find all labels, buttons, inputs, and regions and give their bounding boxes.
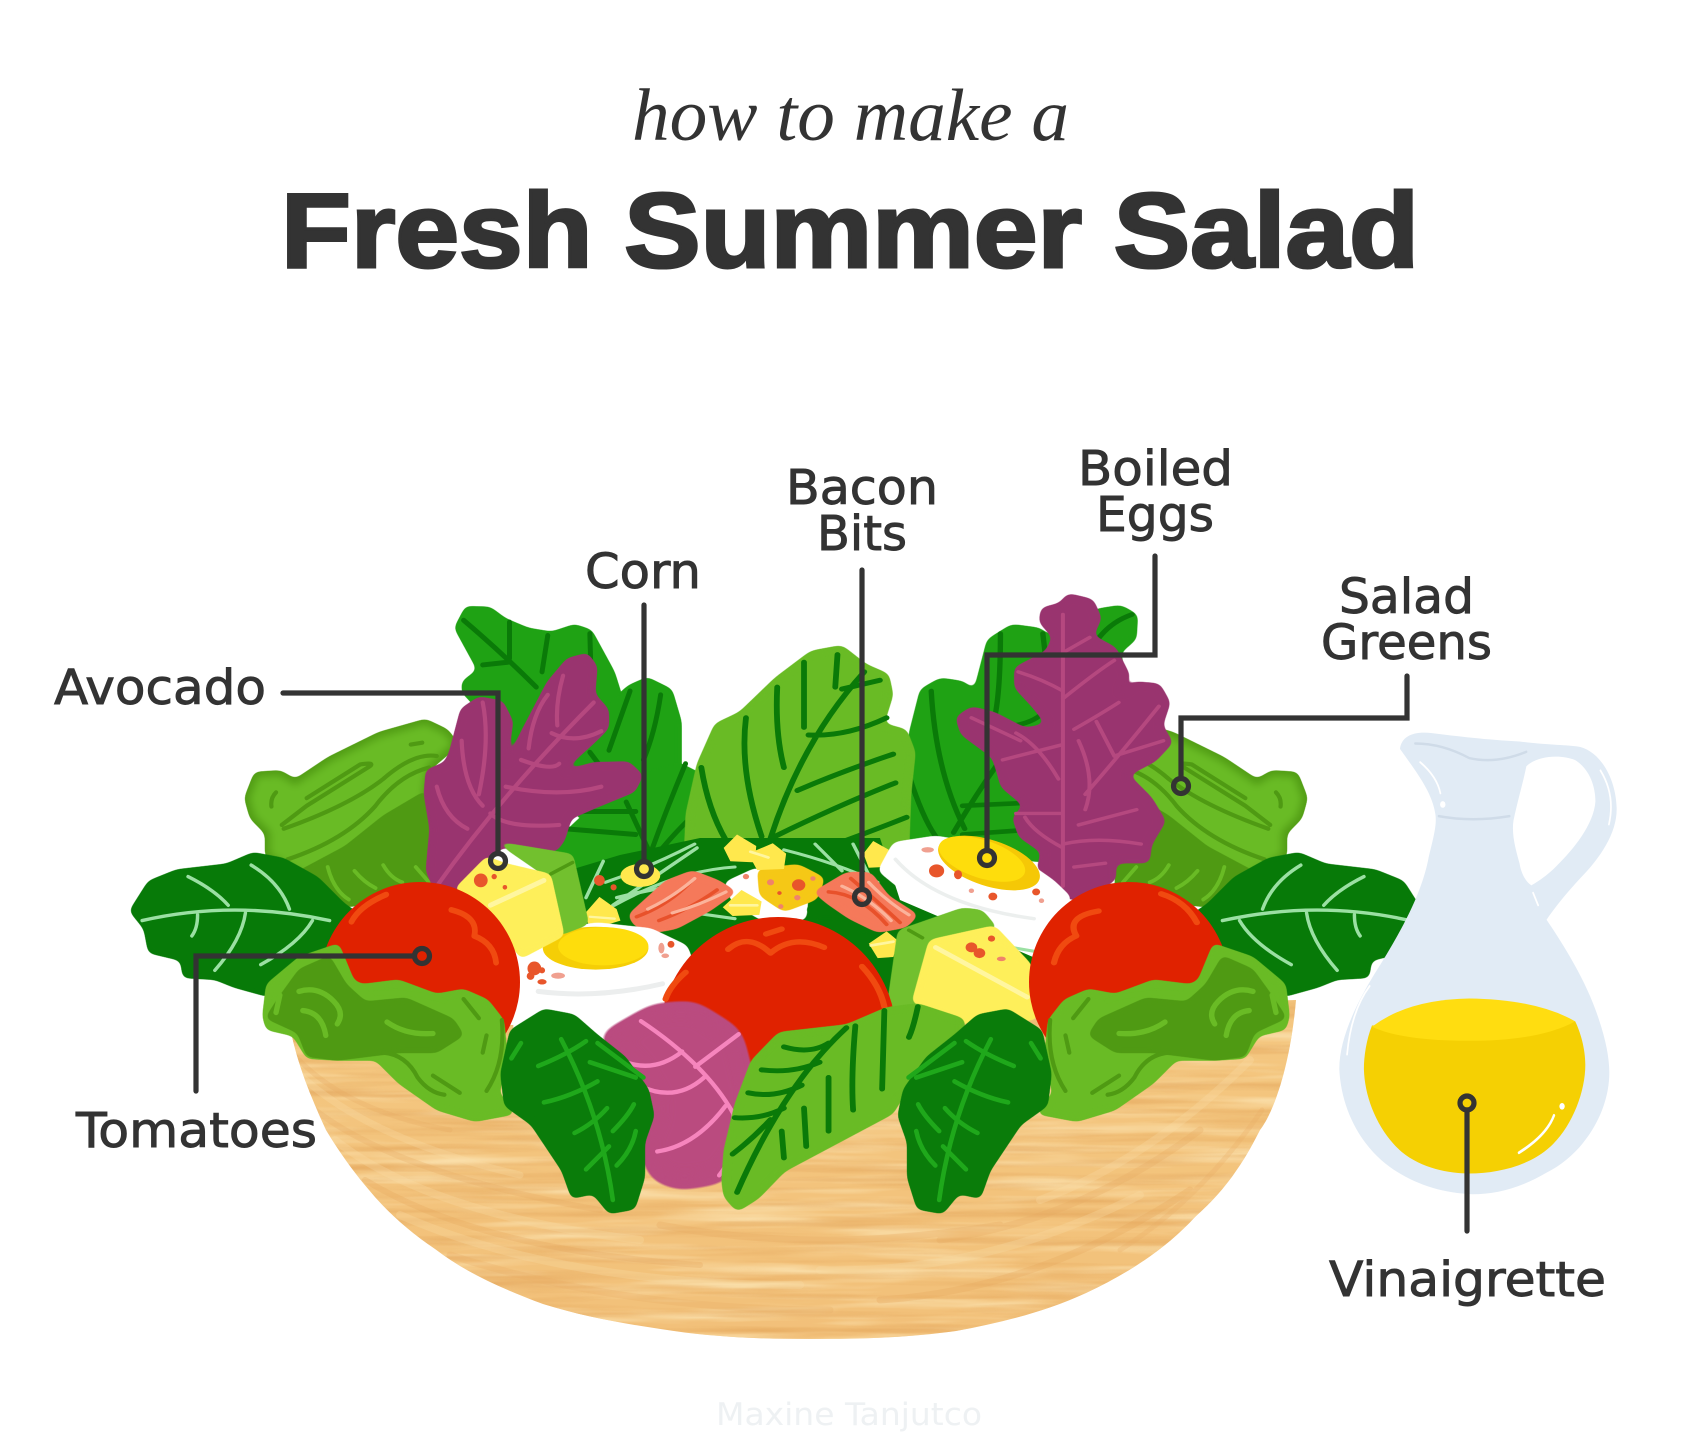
purple leaf, left	[424, 653, 643, 894]
bacon bits	[628, 870, 919, 936]
callout: Tomatoes: Tomatoes	[75, 1103, 317, 1159]
centre light green leaf	[684, 645, 916, 856]
callout: Avocado: Avocado	[54, 660, 266, 716]
title: Fresh Summer Salad: Fresh Summer Salad	[281, 172, 1419, 290]
callout: Boiled Eggs	[980, 441, 1233, 866]
front light green leaf	[721, 1003, 965, 1212]
callout: Bacon Bits	[786, 460, 938, 904]
tomato, centre	[662, 917, 892, 1063]
callout: Salad Greens	[1174, 569, 1492, 794]
callout: Boiled Eggs: Eggs	[1096, 487, 1214, 543]
side leaf, right	[1176, 852, 1423, 997]
front dark leaf, left	[500, 1009, 655, 1214]
tomato, right	[1029, 882, 1222, 1038]
callout: Corn: Corn	[585, 544, 701, 600]
callout: Corn	[585, 544, 701, 876]
front lettuce, left	[262, 943, 516, 1122]
back lettuce base, right	[1095, 890, 1140, 950]
callout: Bacon Bits: Bits	[817, 506, 907, 562]
callout: Salad Greens: Salad	[1339, 569, 1474, 625]
vinaigrette carafe	[1339, 733, 1617, 1194]
front dark leaf, right	[897, 1009, 1052, 1214]
callout: Vinaigrette: Vinaigrette	[1329, 1252, 1606, 1308]
boiled egg, left	[513, 923, 699, 1047]
title: how to make a: how to make a	[632, 75, 1069, 157]
purple leaf, right	[955, 593, 1173, 901]
boiled egg, right	[878, 825, 1072, 947]
back lettuce, right	[1096, 722, 1305, 907]
callout: Tomatoes	[75, 948, 429, 1159]
watermark credit: Maxine Tanjutco	[716, 1397, 982, 1433]
callout: Bacon Bits: Bacon	[786, 460, 938, 516]
callout: Vinaigrette	[1329, 1096, 1606, 1308]
front lettuce, right	[1036, 943, 1290, 1122]
pink radicchio leaf	[593, 1000, 756, 1191]
side leaf, left	[129, 852, 376, 997]
callout: Avocado	[54, 660, 506, 868]
wooden bowl	[280, 990, 1310, 1350]
callout: Salad Greens: Greens	[1321, 615, 1492, 671]
avocado, left	[454, 841, 589, 959]
centre greens mass	[560, 838, 1040, 1000]
callout: Boiled Eggs: Boiled	[1078, 441, 1233, 497]
back greens, left side	[454, 606, 720, 890]
corn and egg bits in centre	[605, 834, 1034, 958]
back greens, right side	[902, 605, 1138, 863]
back lettuce, left	[247, 722, 456, 907]
tomato, left	[326, 882, 520, 1034]
avocado, right	[887, 908, 1037, 1024]
corn pieces, left	[585, 848, 697, 925]
